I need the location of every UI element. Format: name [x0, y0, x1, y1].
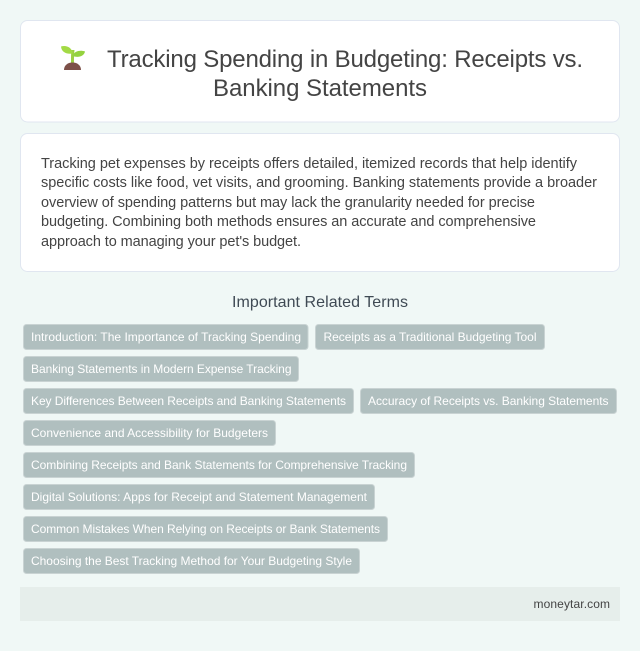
tag: choosing: [24, 548, 360, 574]
title text: Tracking Spending in Budgeting: Receipts vs.: [107, 46, 583, 73]
heading: important related terms: Important Related Terms: [232, 294, 408, 311]
summary text: overview of spending patterns but may lack the granularity needed for precise: [41, 195, 535, 211]
tag: banking statements: [24, 356, 298, 382]
tag: common mistakes: Common Mistakes When Relying on Receipts or Bank Statements: [31, 522, 380, 536]
tag: accuracy: [360, 388, 616, 414]
tag: choosing: Choosing the Best Tracking Method for Your Budgeting Style: [31, 554, 352, 568]
panel: title card: [20, 20, 620, 122]
summary text: [41, 156, 597, 250]
summary text: budgeting. Combining both methods ensures an accurate and comprehensive: [41, 214, 536, 230]
footer source text: moneytar.com: [534, 597, 610, 611]
tag: convenience: [24, 420, 276, 446]
summary text: specific costs like food, vet visits, and grooming. Banking statements provide a broader: [41, 175, 597, 191]
tag: key differences: Key Differences Between Receipts and Banking Statements: [31, 394, 346, 408]
tag: key differences: [24, 388, 354, 414]
icon: seedling: [61, 46, 85, 70]
tag: combining: Combining Receipts and Bank Statements for Comprehensive Tracking: [31, 458, 407, 472]
tag: introduction: Introduction: The Importance of Tracking Spending: [31, 330, 301, 344]
tag: banking statements: Banking Statements in Modern Expense Tracking: [31, 362, 292, 376]
tag: accuracy: Accuracy of Receipts vs. Banking Statements: [368, 394, 608, 408]
tag list: [24, 324, 616, 574]
tag: convenience: Convenience and Accessibility for Budgeters: [31, 426, 268, 440]
footer: [20, 587, 620, 621]
tag: combining: [24, 452, 414, 478]
tag: introduction: [24, 324, 308, 350]
tag: digital solutions: [24, 484, 374, 510]
tag: receipts: [316, 324, 544, 350]
summary text: approach to managing your pet's budget.: [41, 234, 301, 250]
tag: common mistakes: [24, 516, 388, 542]
tag: digital solutions: Digital Solutions: Apps for Receipt and Statement Management: [31, 490, 368, 504]
summary text: Tracking pet expenses by receipts offers detailed, itemized records that help identify: [41, 156, 578, 172]
tag: receipts: Receipts as a Traditional Budgeting Tool: [324, 330, 536, 344]
title text: [107, 46, 583, 102]
title text: Banking Statements: [213, 75, 427, 102]
panel: summary: [20, 134, 620, 272]
